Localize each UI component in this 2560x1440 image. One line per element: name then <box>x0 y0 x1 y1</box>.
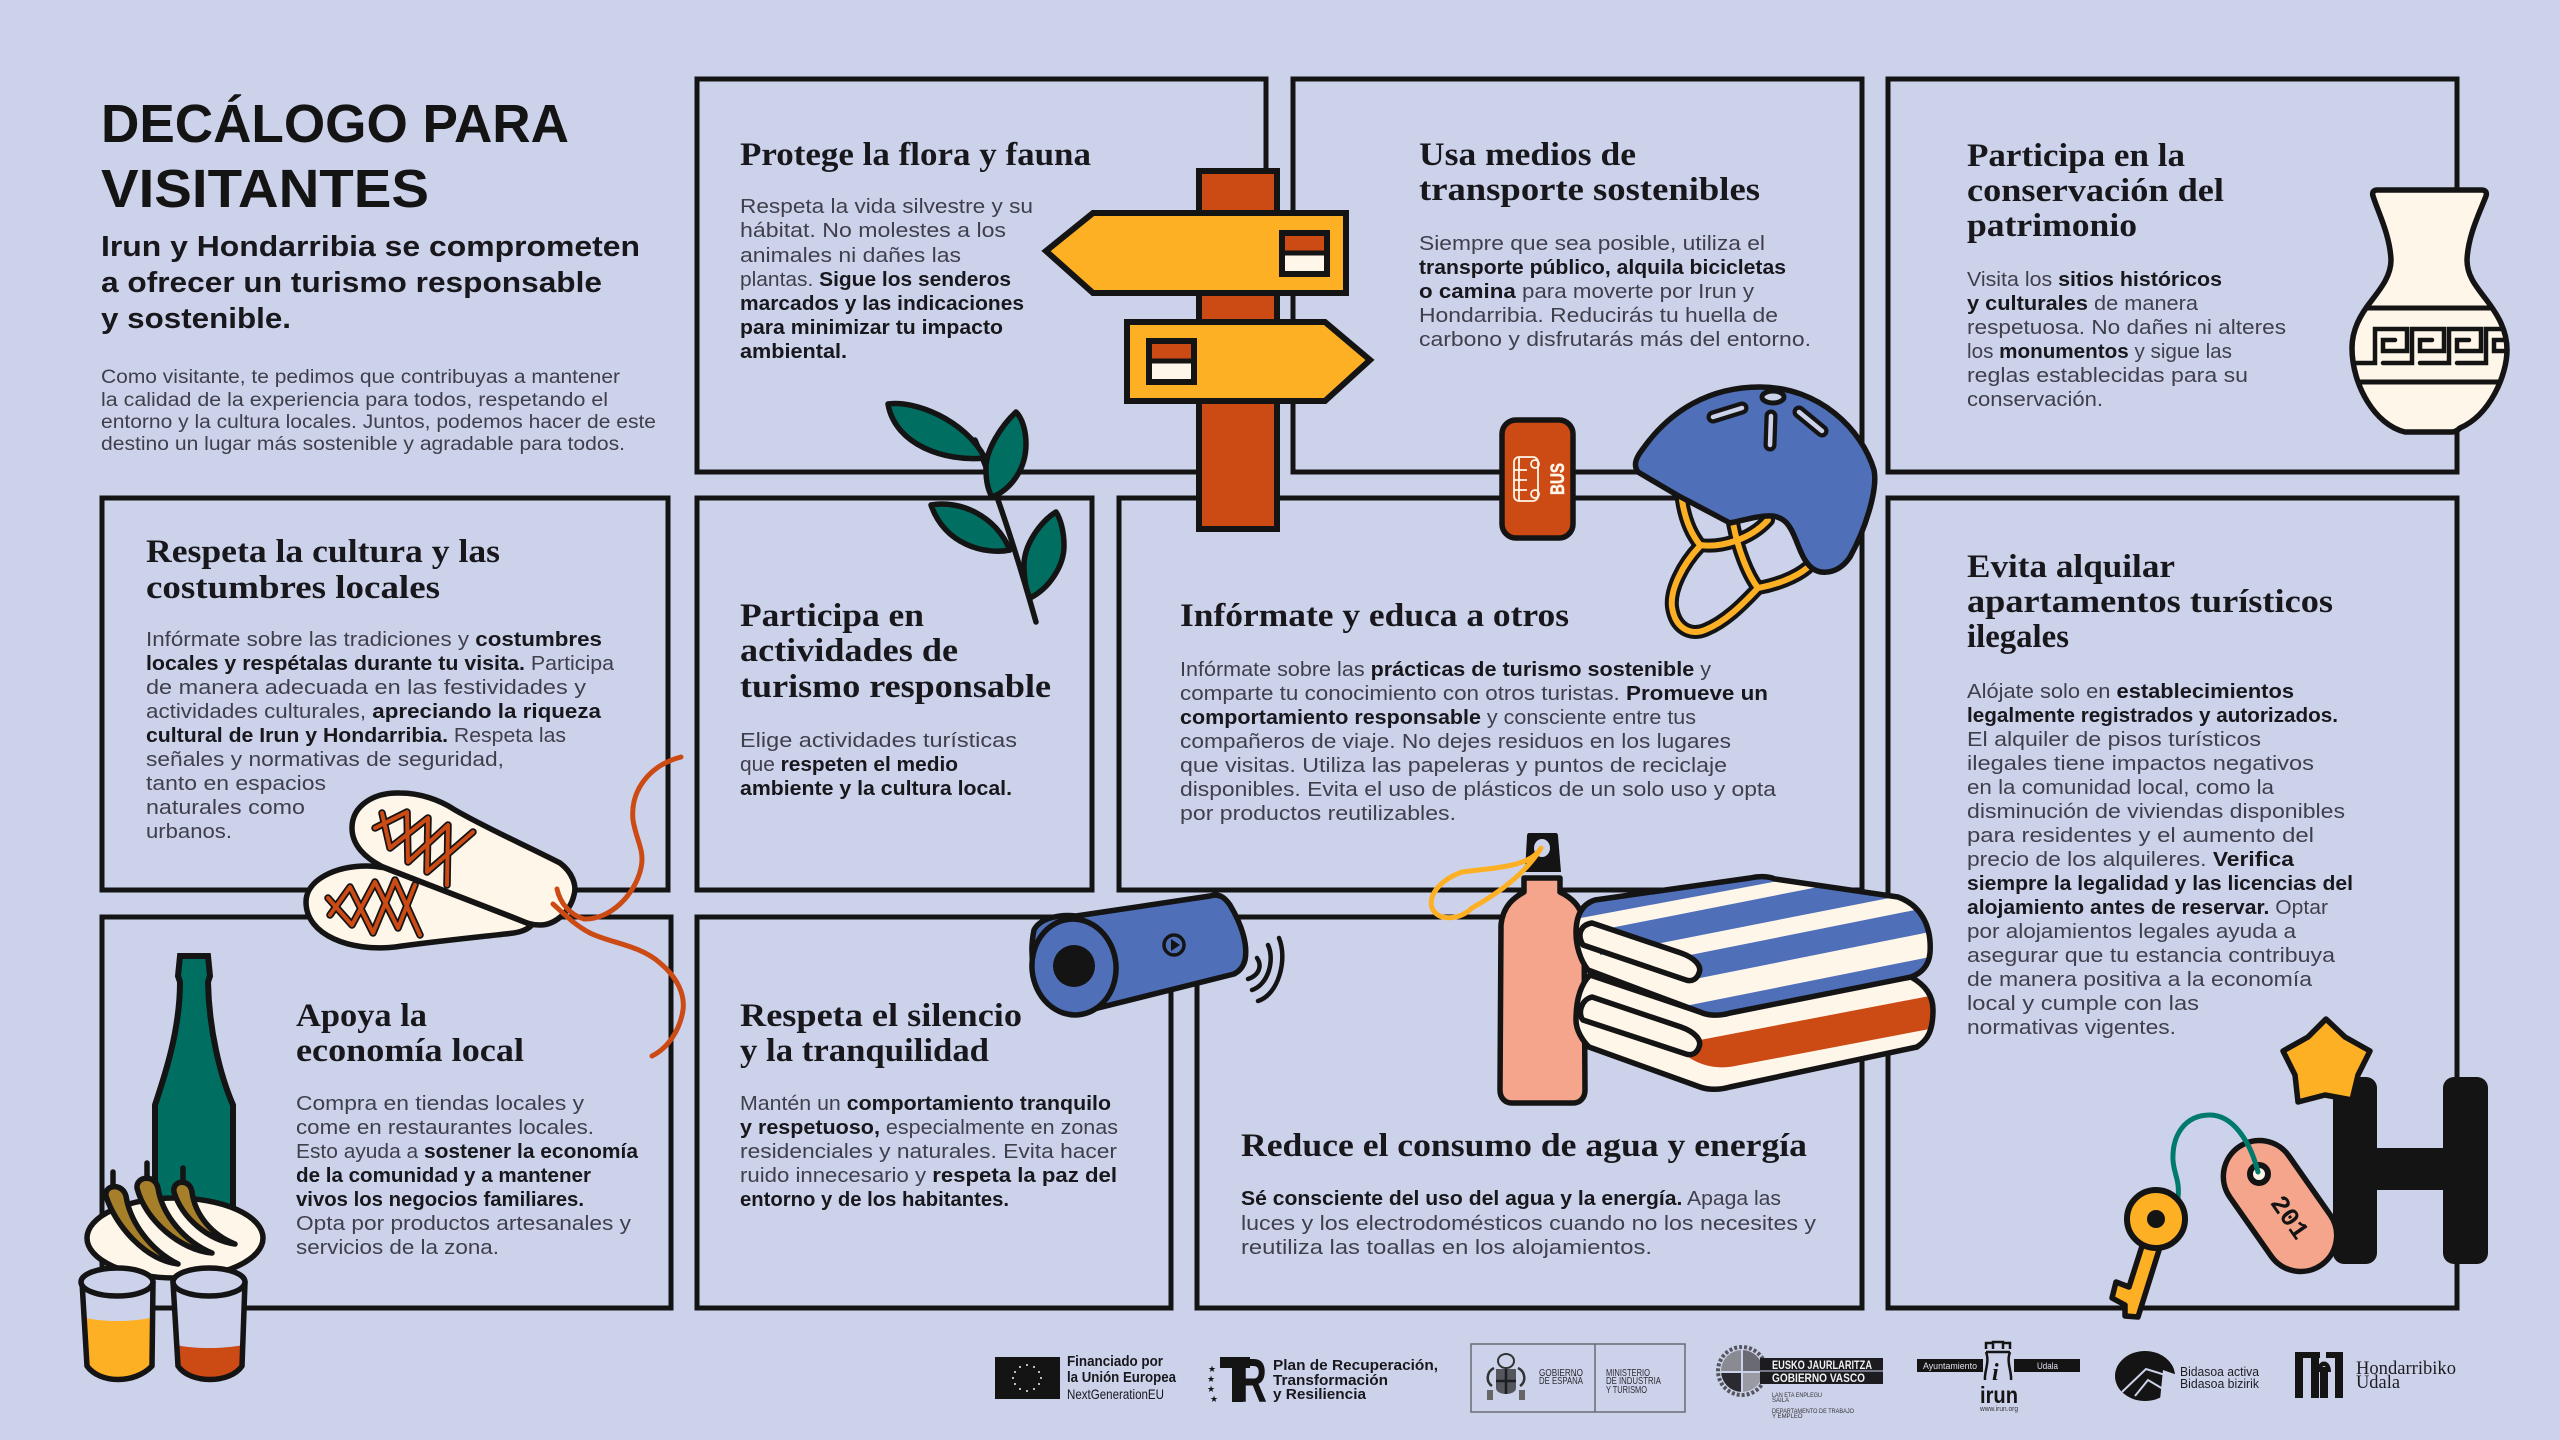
main title: VISITANTES <box>101 159 429 219</box>
heading <box>296 998 524 1069</box>
body text: que respeten el medio <box>740 754 958 776</box>
heading: Protege la flora y fauna <box>740 137 1091 173</box>
logo: plan de recuperación: R <box>1237 1347 1267 1416</box>
logo: plan de recuperación: ★ <box>1207 1374 1215 1384</box>
logo: irun: irun <box>1980 1382 2018 1408</box>
body text: alojamiento antes de reservar. Optar <box>1967 897 2328 919</box>
body text: vivos los negocios familiares. <box>296 1189 584 1211</box>
heading: Apoya la <box>296 998 427 1034</box>
icon: bus stop sign <box>1502 420 1573 538</box>
logo: gobierno vasco: EUSKO JAURLARITZA <box>1772 1358 1872 1372</box>
body text: Respeta la vida silvestre y su <box>740 196 1033 218</box>
panel: infórmate y educa a otros <box>1119 498 1862 890</box>
logo: plan de recuperación: ★ <box>1210 1394 1218 1404</box>
icon: room tag: 201 <box>2263 1190 2314 1246</box>
icon: shoelaces <box>553 757 683 1056</box>
heading: Usa medios de <box>1419 137 1636 173</box>
icon: bottle cap <box>1525 833 1561 872</box>
logo: european union <box>995 1353 1177 1402</box>
logo: hondarribiko udala: Hondarribiko <box>2356 1358 2456 1379</box>
body text: comportamiento responsable y consciente entre tus <box>1180 707 1696 729</box>
heading: costumbres locales <box>146 570 440 606</box>
icon: bicycle helmet <box>1635 387 1875 632</box>
body text: compañeros de viaje. No dejes residuos en los lugares <box>1180 731 1731 753</box>
icon: helmet vents <box>1713 391 1822 445</box>
body text: siempre la legalidad y las licencias del <box>1967 873 2353 895</box>
body text: luces y los electrodomésticos cuando no los necesites y <box>1241 1213 1816 1235</box>
body text: ilegales tiene impactos negativos <box>1967 753 2314 775</box>
main title <box>101 94 569 219</box>
panel: actividades de turismo responsable <box>697 498 1092 890</box>
heading: Participa en la <box>1967 138 2185 174</box>
icon: basque shield <box>1718 1347 1766 1395</box>
icon: right glass <box>173 1268 245 1380</box>
heading: Reduce el consumo de agua y energía <box>1241 1128 1807 1164</box>
logo: hondarribiko udala: Udala <box>2356 1372 2401 1393</box>
body text <box>146 629 615 843</box>
icon: bottom towel <box>1576 975 1940 1089</box>
heading: Respeta la cultura y las <box>146 534 500 570</box>
heading: patrimonio <box>1967 208 2137 244</box>
logo: irun <box>1917 1342 2080 1413</box>
logo: bidasoa activa: Bidasoa bizirik <box>2180 1376 2259 1391</box>
logo: gobierno de españa: DE INDUSTRIA <box>1606 1375 1661 1387</box>
logo: gobierno vasco: Y EMPLEO <box>1772 1414 1803 1420</box>
panel: reduce el consumo <box>1197 917 1862 1308</box>
intro text <box>101 367 656 455</box>
body text: para residentes y el aumento del <box>1967 825 2314 847</box>
logo: plan de recuperación: Transformación <box>1273 1372 1388 1389</box>
main title: DECÁLOGO PARA <box>101 94 569 154</box>
body text: urbanos. <box>146 821 232 843</box>
intro text: Como visitante, te pedimos que contribuyas a mantener <box>101 367 621 388</box>
body text: Opta por productos artesanales y <box>296 1213 631 1235</box>
body text: hábitat. No molestes a los <box>740 220 1006 242</box>
logo: gobierno vasco <box>1718 1347 1883 1420</box>
logo: plan de recuperación: y Resiliencia <box>1273 1386 1367 1403</box>
icon: letter H <box>2333 1077 2488 1264</box>
intro text: la calidad de la experiencia para todos, respetando el <box>101 390 608 411</box>
icon: key with string <box>2112 1115 2258 1317</box>
body text: legalmente registrados y autorizados. <box>1967 705 2338 727</box>
logo: plan de recuperación <box>1207 1347 1438 1416</box>
body text: por productos reutilizables. <box>1180 803 1456 825</box>
body text <box>740 730 1017 800</box>
logo: gobierno vasco: LAN ETA ENPLEGU <box>1772 1393 1822 1399</box>
body text: conservación. <box>1967 389 2103 411</box>
heading: Participa en <box>740 598 924 634</box>
logo: european union: la Unión Europea <box>1067 1369 1177 1386</box>
body text: El alquiler de pisos turísticos <box>1967 729 2261 751</box>
body text: tanto en espacios <box>146 773 326 795</box>
heading <box>1419 137 1760 208</box>
panel: respeta el silencio <box>697 917 1171 1308</box>
body text: para minimizar tu impacto <box>740 317 1003 339</box>
body text: servicios de la zona. <box>296 1237 499 1259</box>
logo: bidasoa activa: Bidasoa activa <box>2180 1364 2260 1379</box>
logo: irun: www.irun.org <box>1979 1406 2018 1413</box>
body text: en la comunidad local, como la <box>1967 777 2275 799</box>
heading <box>740 598 1051 705</box>
body text: Infórmate sobre las tradiciones y costumbres <box>146 629 602 651</box>
body text: reutiliza las toallas en los alojamientos. <box>1241 1237 1652 1259</box>
body text: comparte tu conocimiento con otros turistas. Promueve un <box>1180 683 1768 705</box>
panel: protege la flora y fauna <box>697 79 1266 472</box>
panel: evita alquilar apartamentos ilegales <box>1888 498 2457 1308</box>
icon: greek vase <box>2350 190 2518 432</box>
heading: ilegales <box>1967 619 2069 655</box>
panel: apoya la economía local <box>102 917 671 1308</box>
icon: irun castle <box>1985 1342 2011 1380</box>
heading: Infórmate y educa a otros <box>1180 598 1569 634</box>
body text: de manera positiva a la economía <box>1967 969 2313 991</box>
heading <box>1967 549 2333 655</box>
body text <box>296 1093 639 1259</box>
body text: Mantén un comportamiento tranquilo <box>740 1093 1111 1115</box>
body text <box>740 196 1033 363</box>
body text: Siempre que sea posible, utiliza el <box>1419 233 1765 255</box>
icon: signpost <box>1046 171 1370 529</box>
heading <box>740 998 1022 1069</box>
subtitle: y sostenible. <box>101 303 291 335</box>
body text: Sé consciente del uso del agua y la energía. Apaga las <box>1241 1188 1781 1210</box>
body text: local y cumple con las <box>1967 993 2199 1015</box>
heading: Respeta el silencio <box>740 998 1022 1034</box>
body text: carbono y disfrutarás más del entorno. <box>1419 329 1811 351</box>
body text: respetuosa. No dañes ni alteres <box>1967 317 2286 339</box>
icon: wine bottle <box>155 956 233 1240</box>
subtitle: a ofrecer un turismo responsable <box>101 267 602 299</box>
logo: gobierno de españa <box>1471 1344 1685 1412</box>
logo: irun: Ayuntamiento <box>1923 1361 1977 1372</box>
heading: conservación del <box>1967 173 2224 209</box>
body text: residenciales y naturales. Evita hacer <box>740 1141 1117 1163</box>
body text: de la comunidad y a mantener <box>296 1165 591 1187</box>
logo: gobierno vasco: DEPARTAMENTO DE TRABAJO <box>1772 1409 1854 1415</box>
body text: come en restaurantes locales. <box>296 1117 594 1139</box>
body text: transporte público, alquila bicicletas <box>1419 257 1786 279</box>
body text: disponibles. Evita el uso de plásticos de un solo uso y opta <box>1180 779 1777 801</box>
body text: y culturales de manera <box>1967 293 2199 315</box>
body text: asegurar que tu estancia contribuya <box>1967 945 2336 967</box>
subtitle <box>101 231 640 335</box>
body text: señales y normativas de seguridad, <box>146 749 504 771</box>
body text: Infórmate sobre las prácticas de turismo sostenible y <box>1180 659 1711 681</box>
logo: european union: NextGenerationEU <box>1067 1386 1164 1402</box>
body text: cultural de Irun y Hondarribia. Respeta las <box>146 725 566 747</box>
body text: Elige actividades turísticas <box>740 730 1017 752</box>
intro text: destino un lugar más sostenible y agradable para todos. <box>101 434 625 455</box>
body text: disminución de viviendas disponibles <box>1967 801 2345 823</box>
body text: precio de los alquileres. Verifica <box>1967 849 2295 871</box>
icon: coat of arms <box>1487 1354 1525 1400</box>
logo: bidasoa activa <box>2115 1351 2260 1401</box>
icon: folded towels <box>1570 860 1940 1089</box>
heading: actividades de <box>740 633 958 669</box>
body text: Compra en tiendas locales y <box>296 1093 584 1115</box>
body text <box>1241 1188 1816 1259</box>
intro text: entorno y la cultura locales. Juntos, podemos hacer de este <box>101 412 656 433</box>
body text: que visitas. Utiliza las papeleras y puntos de reciclaje <box>1180 755 1727 777</box>
body text: Esto ayuda a sostener la economía <box>296 1141 639 1163</box>
body text: reglas establecidas para su <box>1967 365 2248 387</box>
logo: gobierno de españa: DE ESPAÑA <box>1539 1374 1583 1387</box>
icon: bus stop sign: BUS <box>1548 463 1569 495</box>
icon: glasses <box>81 1268 245 1380</box>
logo: gobierno vasco: SAILA <box>1772 1398 1789 1404</box>
body text <box>1967 681 2353 1039</box>
icon: star <box>2283 1019 2370 1102</box>
icon: leafy branch <box>888 403 1064 622</box>
logo: european union: Financiado por <box>1067 1353 1163 1370</box>
panel: usa medios de transporte sostenibles <box>1293 79 1862 472</box>
heading <box>146 534 500 606</box>
body text: y respetuoso, especialmente en zonas <box>740 1117 1118 1139</box>
body text: de manera adecuada en las festividades y <box>146 677 586 699</box>
body text: Hondarribia. Reducirás tu huella de <box>1419 305 1778 327</box>
body text: Visita los sitios históricos <box>1967 269 2222 291</box>
body text <box>1967 269 2286 411</box>
panel: conservación del patrimonio <box>1888 79 2457 472</box>
body text: por alojamientos legales ayuda a <box>1967 921 2297 943</box>
heading: apartamentos turísticos <box>1967 584 2333 620</box>
logo: hondarribiko udala <box>2295 1352 2456 1398</box>
heading: economía local <box>296 1033 524 1069</box>
body text: locales y respétalas durante tu visita. Participa <box>146 653 615 675</box>
heading: transporte sostenibles <box>1419 172 1760 208</box>
body text: ambiental. <box>740 341 847 363</box>
title block <box>101 94 656 455</box>
logo: plan de recuperación: ★ <box>1207 1384 1215 1394</box>
logo: gobierno de españa: Y TURISMO <box>1606 1384 1647 1396</box>
heading: y la tranquilidad <box>740 1033 989 1069</box>
body text: Alójate solo en establecimientos <box>1967 681 2294 703</box>
body text: actividades culturales, apreciando la riqueza <box>146 701 602 723</box>
logo: gobierno de españa: GOBIERNO <box>1539 1367 1583 1379</box>
body text <box>1419 233 1811 351</box>
logo: plan de recuperación: Plan de Recuperación, <box>1273 1357 1438 1374</box>
body text: los monumentos y sigue las <box>1967 341 2232 363</box>
heading: Evita alquilar <box>1967 549 2175 585</box>
logo: gobierno vasco: GOBIERNO VASCO <box>1772 1371 1865 1385</box>
icon: top towel <box>1573 874 1933 1018</box>
heading <box>1967 138 2224 244</box>
icon: left glass <box>81 1268 153 1380</box>
panel: respeta la cultura <box>102 498 668 890</box>
icon: plate with peppers <box>87 1163 263 1278</box>
body text: o camina para moverte por Irun y <box>1419 281 1754 303</box>
body text: marcados y las indicaciones <box>740 293 1024 315</box>
icon: sneakers <box>306 757 683 1056</box>
icon: sound waves <box>1248 938 1282 1001</box>
logo: gobierno de españa: MINISTERIO <box>1606 1367 1650 1379</box>
footer logos <box>995 1342 2456 1420</box>
body text: ambiente y la cultura local. <box>740 778 1012 800</box>
icon: room tag <box>2209 1126 2351 1286</box>
heading: turismo responsable <box>740 669 1051 705</box>
body text: animales ni dañes las <box>740 245 961 267</box>
logo: irun: i <box>1992 1360 1999 1386</box>
logo: irun: Udala <box>2037 1361 2059 1372</box>
icon: bus glyph <box>1514 457 1539 501</box>
body text: naturales como <box>146 797 305 819</box>
subtitle: Irun y Hondarribia se comprometen <box>101 231 640 263</box>
body text: entorno y de los habitantes. <box>740 1189 1009 1211</box>
icon: speaker <box>1027 895 1282 1019</box>
body text <box>1180 659 1777 825</box>
icon: water bottle <box>1431 833 1585 1103</box>
body text: normativas vigentes. <box>1967 1017 2176 1039</box>
body text: plantas. Sigue los senderos <box>740 269 1011 291</box>
body text <box>740 1093 1118 1211</box>
logo: plan de recuperación: ★ <box>1208 1364 1216 1374</box>
body text: ruido innecesario y respeta la paz del <box>740 1165 1117 1187</box>
